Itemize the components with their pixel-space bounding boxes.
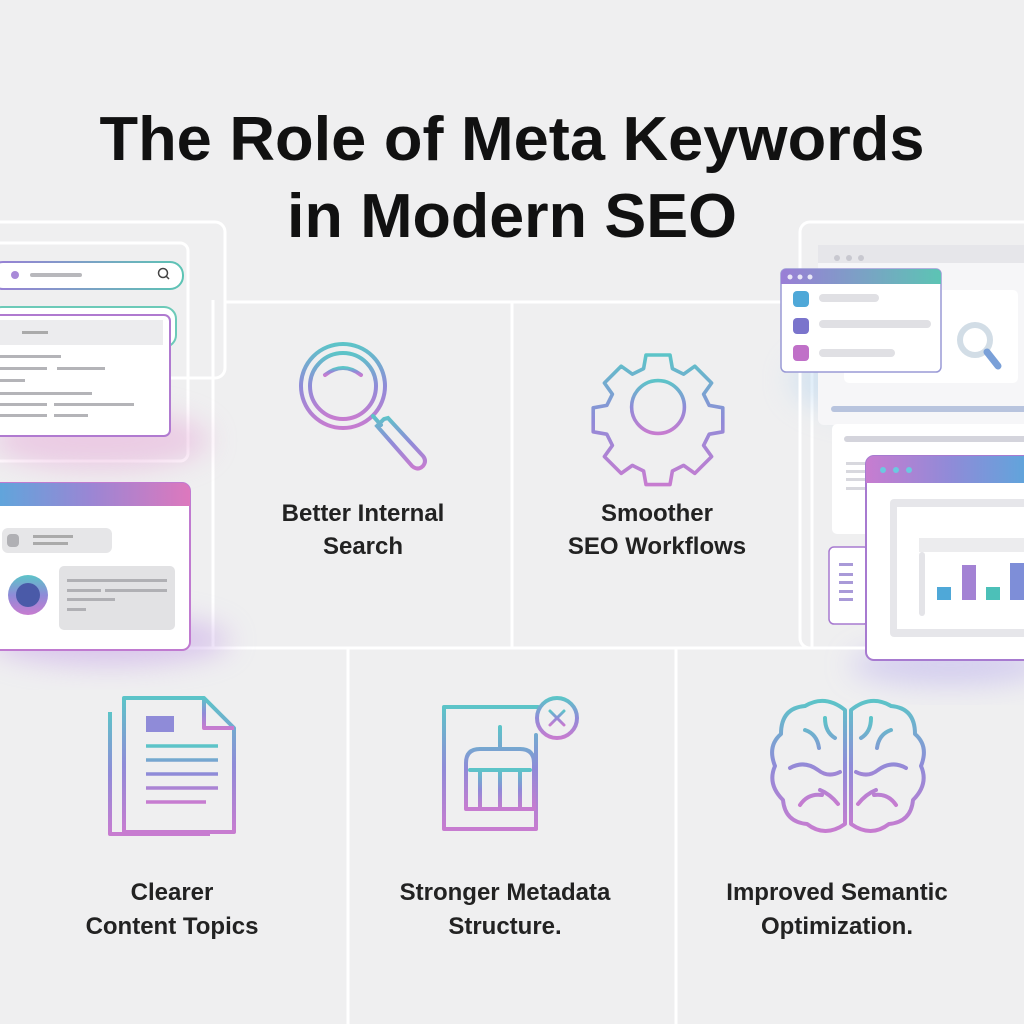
title [100,105,924,251]
labels: Optimization. [761,913,913,940]
icon: magnifier [301,344,425,468]
labels: Structure. [448,913,562,940]
small list window [781,269,941,372]
labels: SEO Workflows [568,533,746,560]
chat browser card [0,483,190,650]
title: in Modern SEO [287,182,737,251]
search bar [0,262,183,289]
title: The Role of Meta Keywords [100,105,924,174]
right mockups [781,222,1024,685]
labels: Stronger Metadata [400,879,611,906]
icon: brain [772,701,924,836]
labels: Better Internal [282,500,444,527]
labels: Smoother [601,500,713,527]
labels: Search [323,533,403,560]
icon: documents [110,698,234,834]
labels: Clearer [131,879,213,906]
icon: metadata structure [444,698,577,829]
grid lines [0,300,1024,1024]
icon: gear [593,355,723,485]
chart browser [866,456,1024,660]
left mockups [0,222,230,665]
labels: Content Topics [86,913,258,940]
small doc card [829,547,869,624]
labels: Improved Semantic [726,879,948,906]
magnifier [960,325,998,366]
labels [86,500,948,940]
results card [0,307,176,436]
